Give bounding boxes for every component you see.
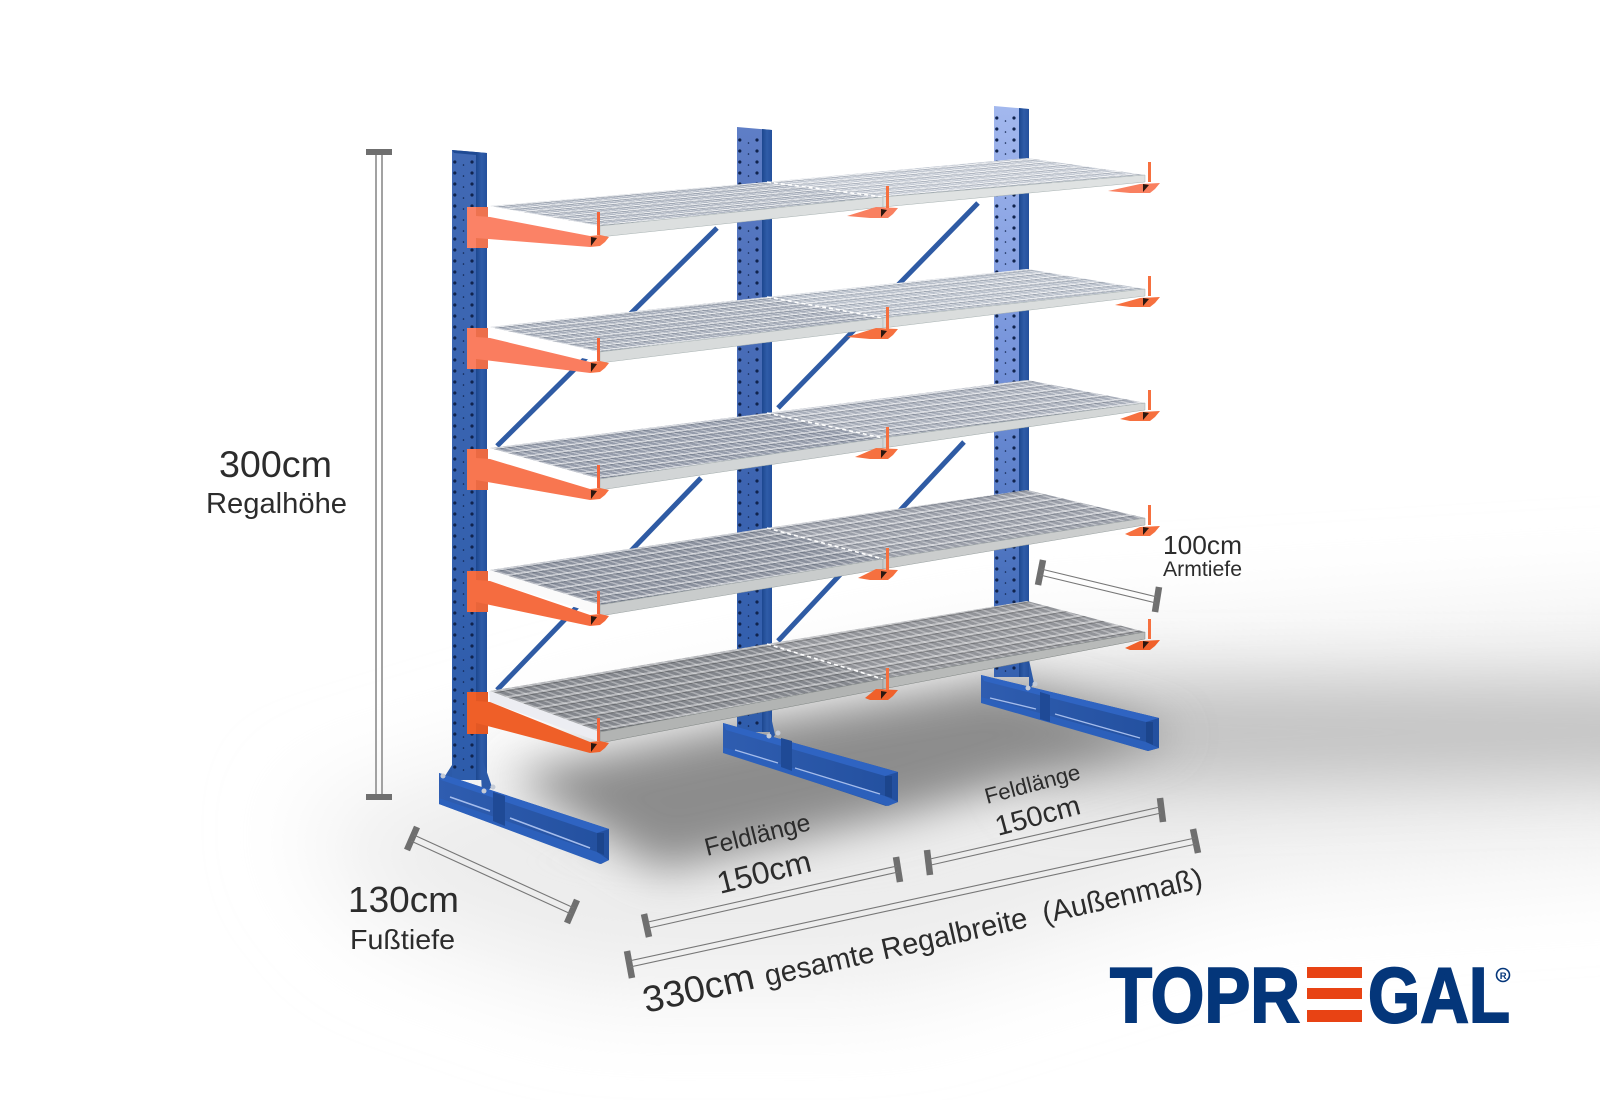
label: 300cm Regalhöhe	[206, 444, 347, 520]
bracket level 4	[467, 570, 609, 626]
label: Feldlänge 150cm left: 150cm	[713, 844, 815, 901]
dimension: total width	[627, 829, 1198, 978]
label: 130cm Fußtiefe: 130cm	[348, 879, 459, 920]
label: 100cm Armtiefe: 100cm	[1163, 530, 1242, 560]
right brackets	[1108, 162, 1160, 650]
shelf level 5	[490, 601, 1145, 743]
label: 130cm Fußtiefe: Fußtiefe	[350, 924, 455, 955]
post A	[445, 150, 492, 795]
dimension: foot depth	[407, 827, 577, 923]
foot B	[723, 723, 898, 806]
label: 300cm Regalhöhe: Regalhöhe	[206, 488, 347, 520]
label: 330cm gesamte Regalbreite (Außenmaß): gesamte Regalbreite (Außenmaß)	[761, 862, 1206, 993]
shelf level 3	[490, 380, 1145, 490]
label: 100cm Armtiefe	[1163, 530, 1242, 581]
logo: TOPREGAL: TOPR	[1110, 951, 1300, 1039]
logo: TOPREGAL: R	[1500, 971, 1507, 982]
diagonal braces	[497, 203, 978, 690]
post C	[994, 106, 1034, 690]
foot C	[981, 675, 1159, 751]
label: Feldlänge 150cm right: 150cm	[992, 789, 1084, 842]
middle brackets	[847, 186, 898, 700]
dimension: bay length 1	[644, 857, 900, 937]
label: Feldlänge 150cm right: Feldlänge	[982, 759, 1083, 809]
shelf level 2	[490, 269, 1145, 363]
label: 330cm gesamte Regalbreite (Außenmaß)	[639, 862, 1206, 1021]
foot A	[439, 773, 609, 864]
label: 100cm Armtiefe: Armtiefe	[1163, 558, 1242, 581]
bracket level 1	[467, 206, 609, 248]
bracket level 3	[467, 448, 609, 500]
label: 130cm Fußtiefe	[348, 879, 459, 955]
label: 300cm Regalhöhe: 300cm	[219, 444, 332, 485]
left brackets	[467, 206, 609, 753]
bracket level 2	[467, 327, 609, 373]
label: Feldlänge 150cm right	[982, 759, 1084, 842]
shelf level 4	[490, 490, 1145, 616]
post B	[737, 127, 775, 742]
floor shadow	[300, 610, 1600, 990]
label: Feldlänge 150cm left	[702, 809, 815, 901]
shelf level 1	[490, 158, 1145, 237]
logo: TOPREGAL	[1110, 951, 1510, 1039]
dimension: bay length 2	[927, 798, 1163, 875]
bracket level 5	[467, 691, 609, 753]
label: 330cm gesamte Regalbreite (Außenmaß): 330cm	[639, 956, 758, 1021]
logo: TOPREGAL: GAL	[1368, 951, 1510, 1039]
dimension: arm depth	[1038, 560, 1159, 612]
label: Feldlänge 150cm left: Feldlänge	[702, 809, 813, 862]
dimension: height	[366, 149, 392, 800]
